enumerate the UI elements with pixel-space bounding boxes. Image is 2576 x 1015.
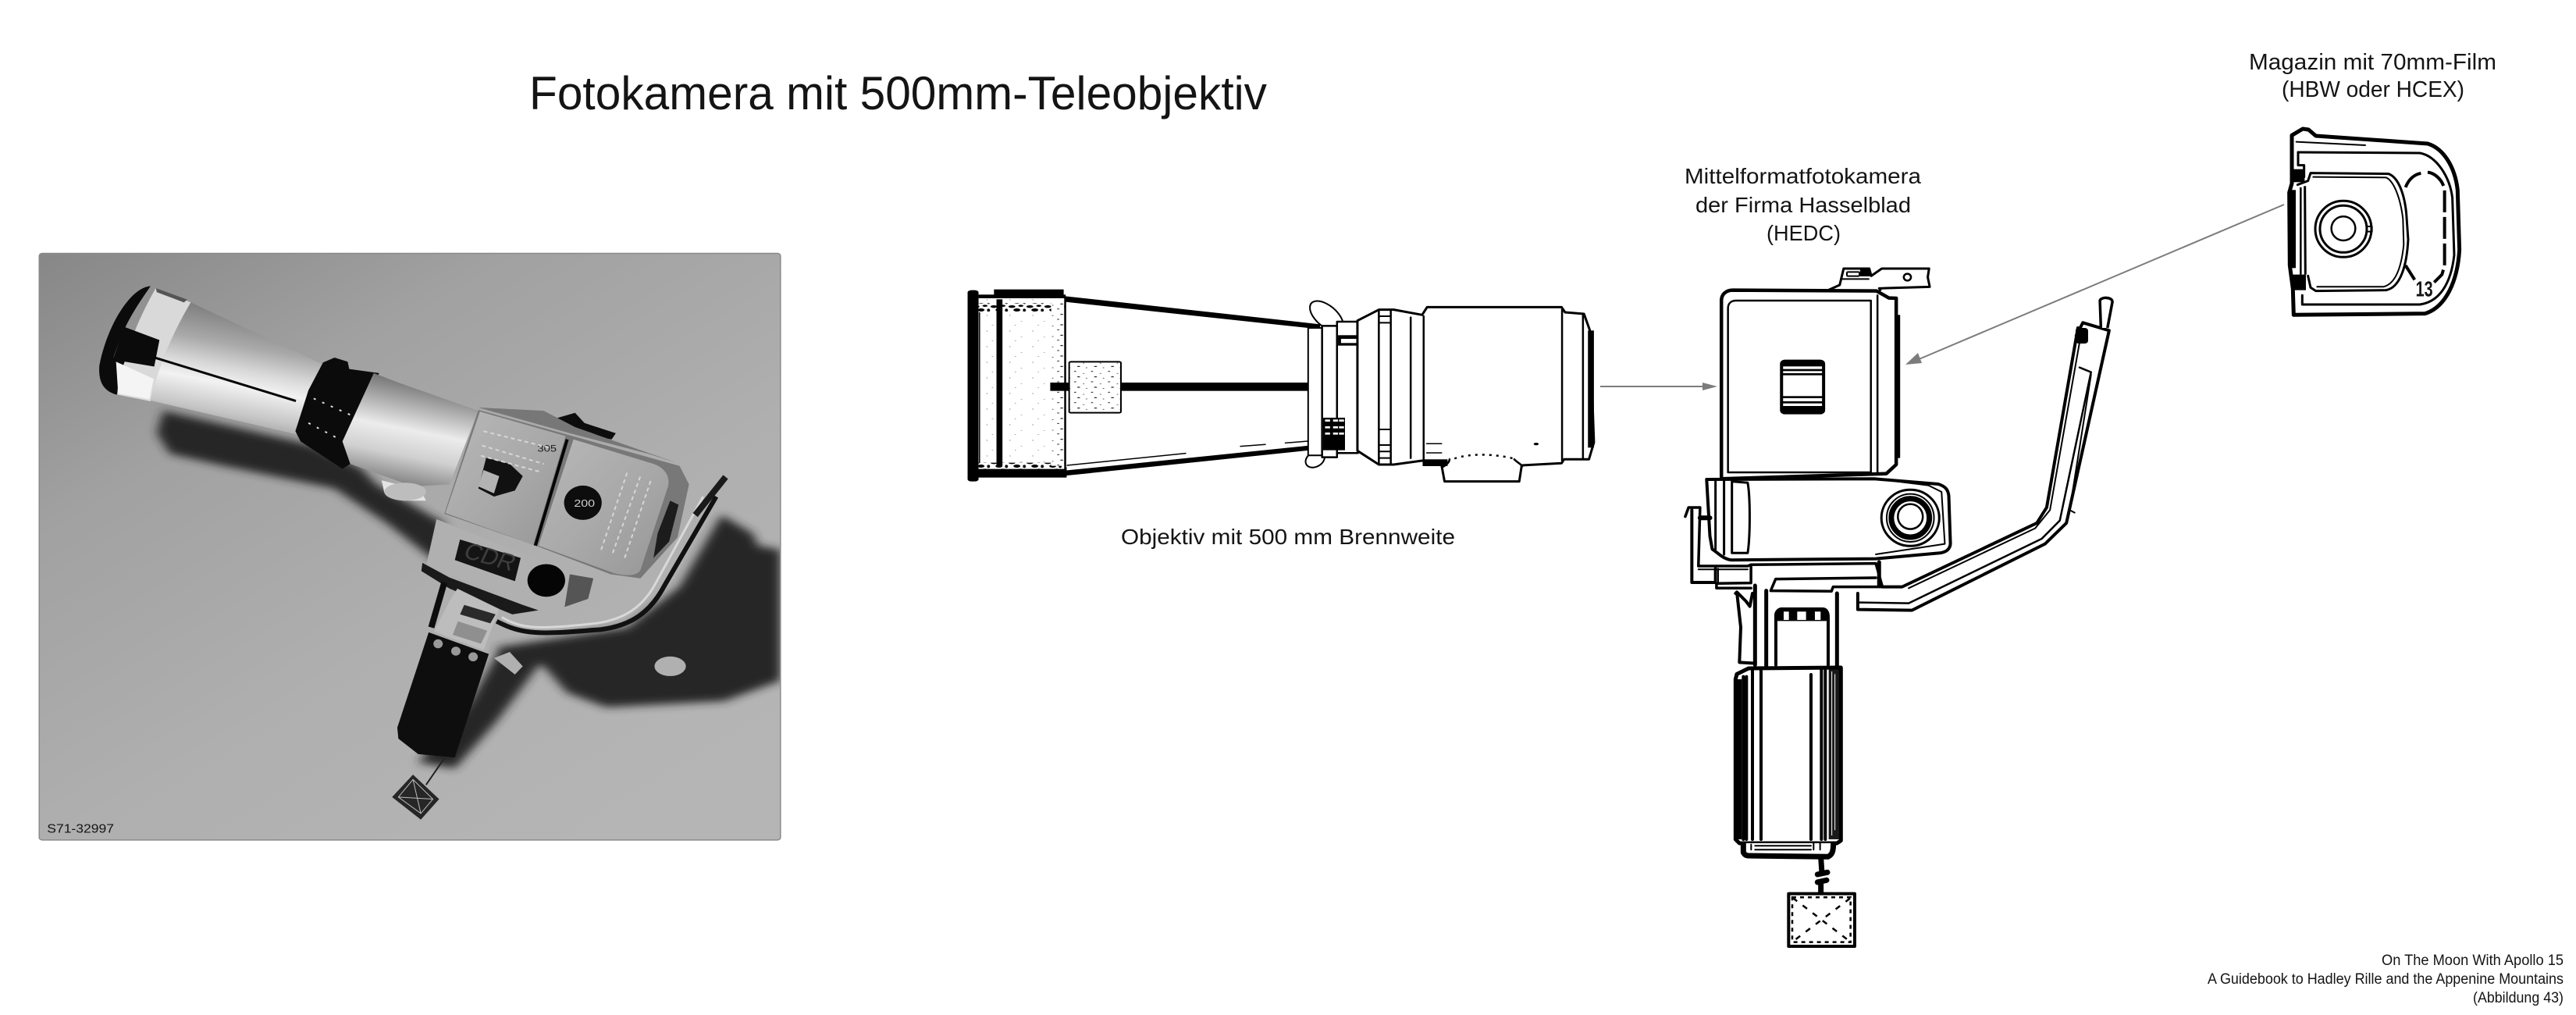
top lever [1828,269,1930,291]
tag [1788,894,1855,946]
camera body plates: 305 [537,443,557,454]
focus knob [1781,361,1823,413]
magazine outer shell [2290,129,2460,315]
camera body plates: 200 [574,499,595,510]
pistol grip [397,632,489,757]
diagram: grip and remote tag line drawing [1735,586,1855,946]
central rod and speckled box [1050,361,1309,413]
label: medium-format camera: der Firma Hasselblad [1695,193,1911,217]
photo background [39,254,781,840]
lens cone [151,302,322,436]
label: film magazine: Magazin mit 70mm-Film [2249,50,2496,75]
grip neck [1735,586,1837,666]
photo panel: camera with telephoto lens [39,254,781,840]
diagram: 500 mm lens line drawing [968,290,1594,482]
cast shadows [157,411,781,768]
label: medium-format camera: (HEDC) [1767,221,1841,245]
wing nuts [1303,299,1350,468]
source credit: A Guidebook to Hadley Rille and the Appenine Mountains [2208,971,2564,988]
lens hood section [968,290,1066,482]
source credit: (Abbildung 43) [2473,990,2564,1006]
side arm [496,477,726,632]
inner door [2297,173,2408,291]
focus ring [295,358,379,468]
shadow light spots [654,657,686,676]
camera top housing [1721,290,1900,479]
arrow: lens to camera [1600,383,1717,390]
photo number: S71-32997 [47,822,114,835]
diagram: camera body line drawing [1685,269,2112,611]
cord [1817,857,1827,892]
title: Fotokamera mit 500mm-Teleobjektiv [529,67,1267,119]
dashed window and number: 13 [2416,276,2433,301]
dashed window and number [2406,173,2445,301]
base plate [1685,508,1882,591]
label: film magazine: (HBW oder HCEX) [2282,77,2464,102]
grip barrel [1735,668,1841,857]
remote tag [392,758,444,820]
lens main barrel [1357,307,1594,482]
lens cone outline [1066,296,1320,475]
camera body plates [444,408,689,579]
lens barrel [343,373,479,486]
lower housing [1706,479,1951,560]
label: medium-format camera: Mittelformatfotokamera [1685,164,1921,188]
film magazine window [564,486,602,520]
label: film magazine [2249,50,2496,102]
carrying arm [1858,297,2112,611]
diagram: film magazine line drawing [2290,129,2460,315]
film spool hub [2315,201,2372,257]
source credit [2208,953,2564,1006]
arrow: magazine to camera [1905,205,2284,365]
mirror knob [479,458,523,497]
viewfinder eyepiece [1881,490,1939,546]
lower housing with CDR label [422,519,593,614]
lower housing with CDR label: CDR [460,539,520,576]
label: lens: Objektiv mit 500 mm Brennweite [1121,525,1455,549]
source credit: On The Moon With Apollo 15 [2382,953,2564,969]
focus rings [1308,322,1358,458]
label: medium-format camera [1685,164,1921,245]
handle bracket [432,582,500,650]
tripod foot [382,480,426,500]
lens hood [99,286,190,401]
